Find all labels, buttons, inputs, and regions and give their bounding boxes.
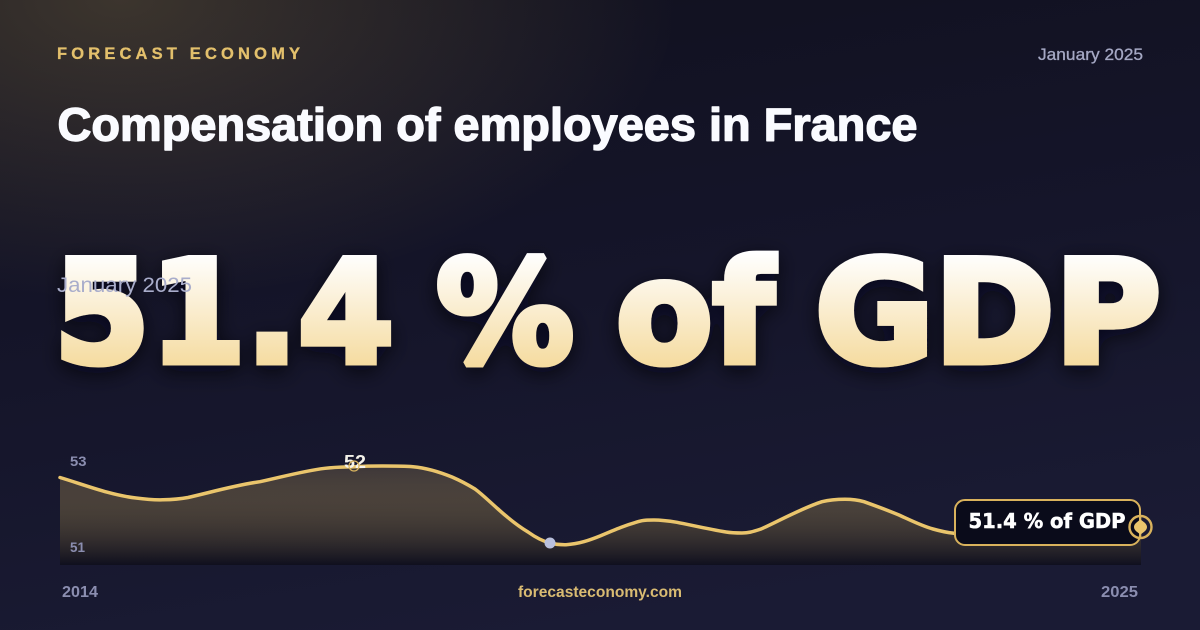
- callout: [955, 500, 1140, 545]
- callout: 51.4 % of GDP: [968, 509, 1126, 533]
- sparkline chart: [60, 452, 1152, 565]
- trend line: [60, 466, 960, 545]
- footer website: forecasteconomy.com: [518, 584, 682, 601]
- current value marker: [1130, 516, 1152, 538]
- hero value: 51.4: [54, 231, 394, 396]
- date top right: January 2025: [1038, 46, 1143, 64]
- peak marker: [349, 461, 359, 471]
- x axis end year: 2025: [1101, 584, 1138, 601]
- overlapping date label: January 2025: [57, 274, 192, 297]
- peak value label: 52: [344, 452, 366, 472]
- low point marker: [544, 538, 556, 548]
- x axis start year: 2014: [62, 584, 98, 601]
- area fill: [60, 466, 1141, 565]
- hero value: %: [436, 231, 574, 396]
- hero value: [54, 231, 1161, 396]
- axis label 53: 53: [70, 453, 87, 469]
- axis label 51: 51: [70, 539, 85, 555]
- title: Compensation of employees in France: [58, 98, 918, 150]
- hero value: of: [616, 231, 776, 396]
- hero value: GDP: [815, 231, 1161, 396]
- brand label: FORECAST ECONOMY: [57, 45, 300, 63]
